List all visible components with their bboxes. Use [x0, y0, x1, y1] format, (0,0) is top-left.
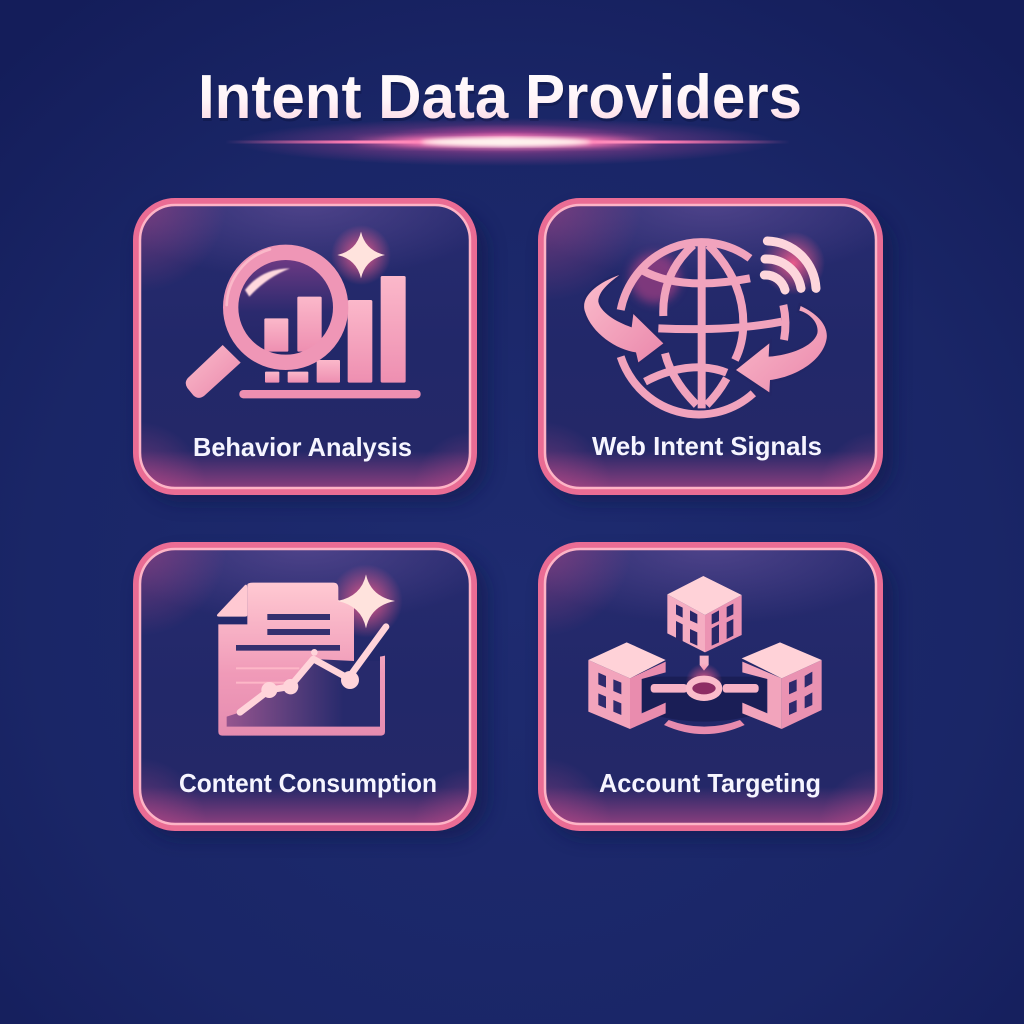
left building: [588, 642, 666, 729]
title: Intent Data Providers: [198, 63, 802, 132]
label: Behavior Analysis: [193, 432, 412, 462]
dark recess behind hub: [642, 677, 767, 722]
icon: globe with arrows and signal: [584, 232, 827, 414]
icon: connected buildings: [588, 576, 822, 734]
document: [217, 583, 385, 736]
arrow: left: [584, 275, 663, 362]
arrow: right: [736, 306, 827, 392]
label: Web Intent Signals: [592, 431, 822, 461]
panel: behavior analysis: [133, 198, 490, 505]
signal waves: [764, 241, 816, 290]
magnifier handle: [186, 345, 241, 398]
icon: document with trend line: [217, 564, 403, 736]
connector pin: [700, 656, 709, 671]
lower arc: [664, 720, 745, 734]
sparkle: [331, 225, 391, 285]
globe: [621, 242, 785, 414]
trend line: [240, 627, 386, 712]
right building: [742, 642, 822, 729]
label: Content Consumption: [179, 768, 437, 798]
bars: [265, 276, 406, 383]
panel: web intent signals: [538, 198, 895, 505]
panel: account targeting: [538, 542, 895, 840]
label: Account Targeting: [599, 768, 821, 798]
top building: [667, 576, 742, 652]
baseline: [239, 390, 421, 398]
glowing title underline: [225, 118, 790, 166]
hub and connecting bars: [651, 663, 759, 700]
icon: magnifier over bar chart: [186, 225, 421, 398]
title: Intent Data Providers: [199, 66, 803, 135]
magnifier lens: [227, 249, 341, 362]
panel: content consumption: [133, 542, 492, 840]
sparkle: [337, 574, 395, 628]
